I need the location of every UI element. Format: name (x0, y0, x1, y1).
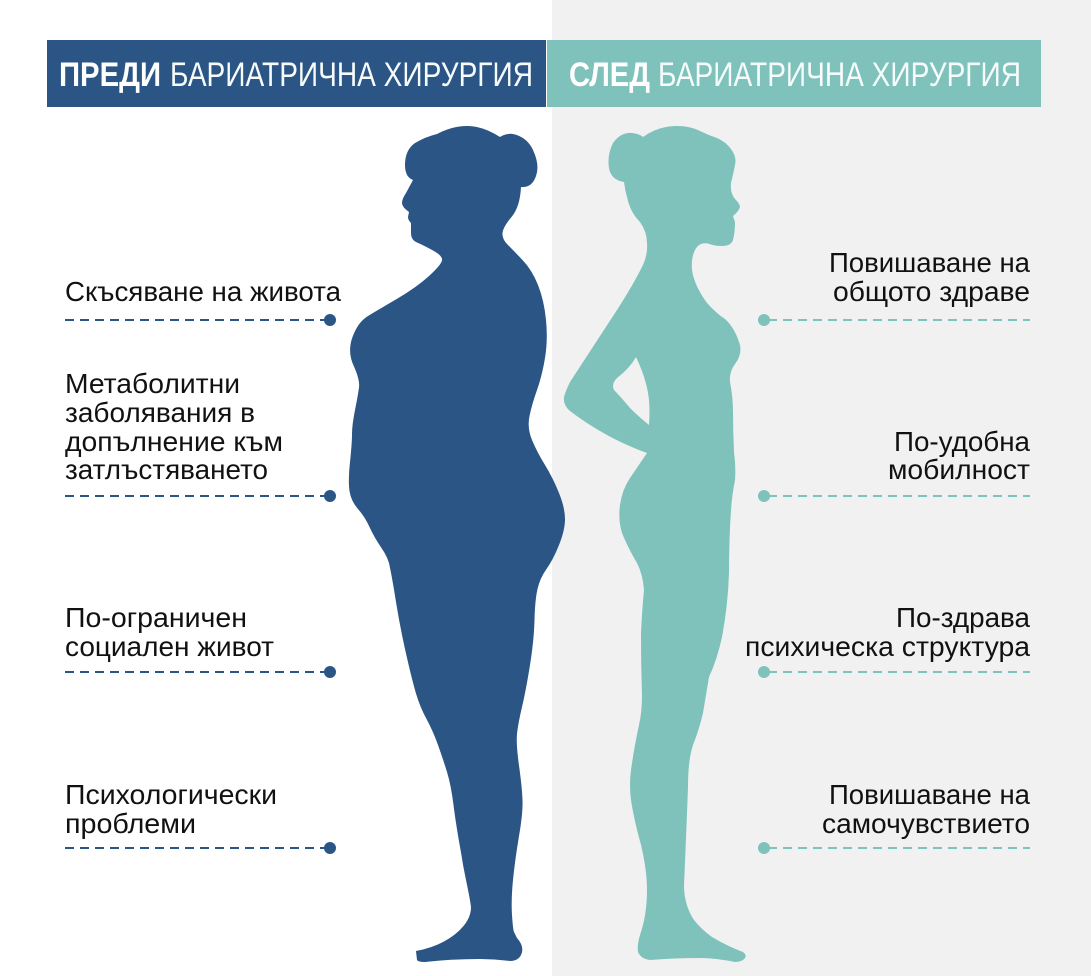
callout: improved general health (758, 247, 1031, 326)
callout: healthier mental state: По-здрава (896, 602, 1031, 633)
heading: before surgery (47, 40, 546, 107)
silhouette: woman after surgery (564, 126, 746, 962)
callout: limited social life (65, 602, 336, 678)
callout: shortened life (65, 276, 342, 326)
callout: improved well-being: самочувствието (822, 808, 1030, 839)
panel: after background (552, 0, 1091, 976)
heading: before surgery: БАРИАТРИЧНА ХИРУРГИЯ (170, 56, 533, 94)
callout: limited social life: По-ограничен (65, 602, 247, 633)
heading: after surgery: БАРИАТРИЧНА ХИРУРГИЯ (658, 56, 1021, 94)
callout: easier mobility (758, 426, 1031, 502)
callout: improved well-being: Повишаване на (829, 779, 1031, 810)
callout: metabolic diseases: Метаболитни (65, 368, 240, 399)
callout: improved general health: общото здраве (833, 276, 1030, 307)
callout: limited social life: социален живот (65, 631, 274, 662)
callout: improved general health: Повишаване на (829, 247, 1031, 278)
callout: psychological problems (65, 779, 336, 854)
callout: metabolic diseases: допълнение към (65, 426, 283, 457)
callout: psychological problems: Психологически (65, 779, 277, 810)
callout: metabolic diseases (65, 368, 336, 502)
callout: improved well-being (758, 779, 1031, 854)
callout: easier mobility: мобилност (888, 454, 1030, 485)
heading: before surgery: ПРЕДИ (59, 56, 161, 94)
callout: healthier mental state: психическа структура (745, 631, 1031, 662)
callout: psychological problems: проблеми (65, 808, 196, 839)
callout: healthier mental state (745, 602, 1031, 678)
silhouette: woman before surgery (349, 126, 565, 962)
callout: easier mobility: По-удобна (894, 426, 1031, 457)
callout: shortened life: Скъсяване на живота (65, 276, 342, 307)
callout: metabolic diseases: заболявания в (65, 397, 255, 428)
heading: after surgery: СЛЕД (569, 56, 650, 94)
callout: metabolic diseases: затлъстяването (65, 454, 268, 485)
heading: after surgery (547, 40, 1041, 107)
